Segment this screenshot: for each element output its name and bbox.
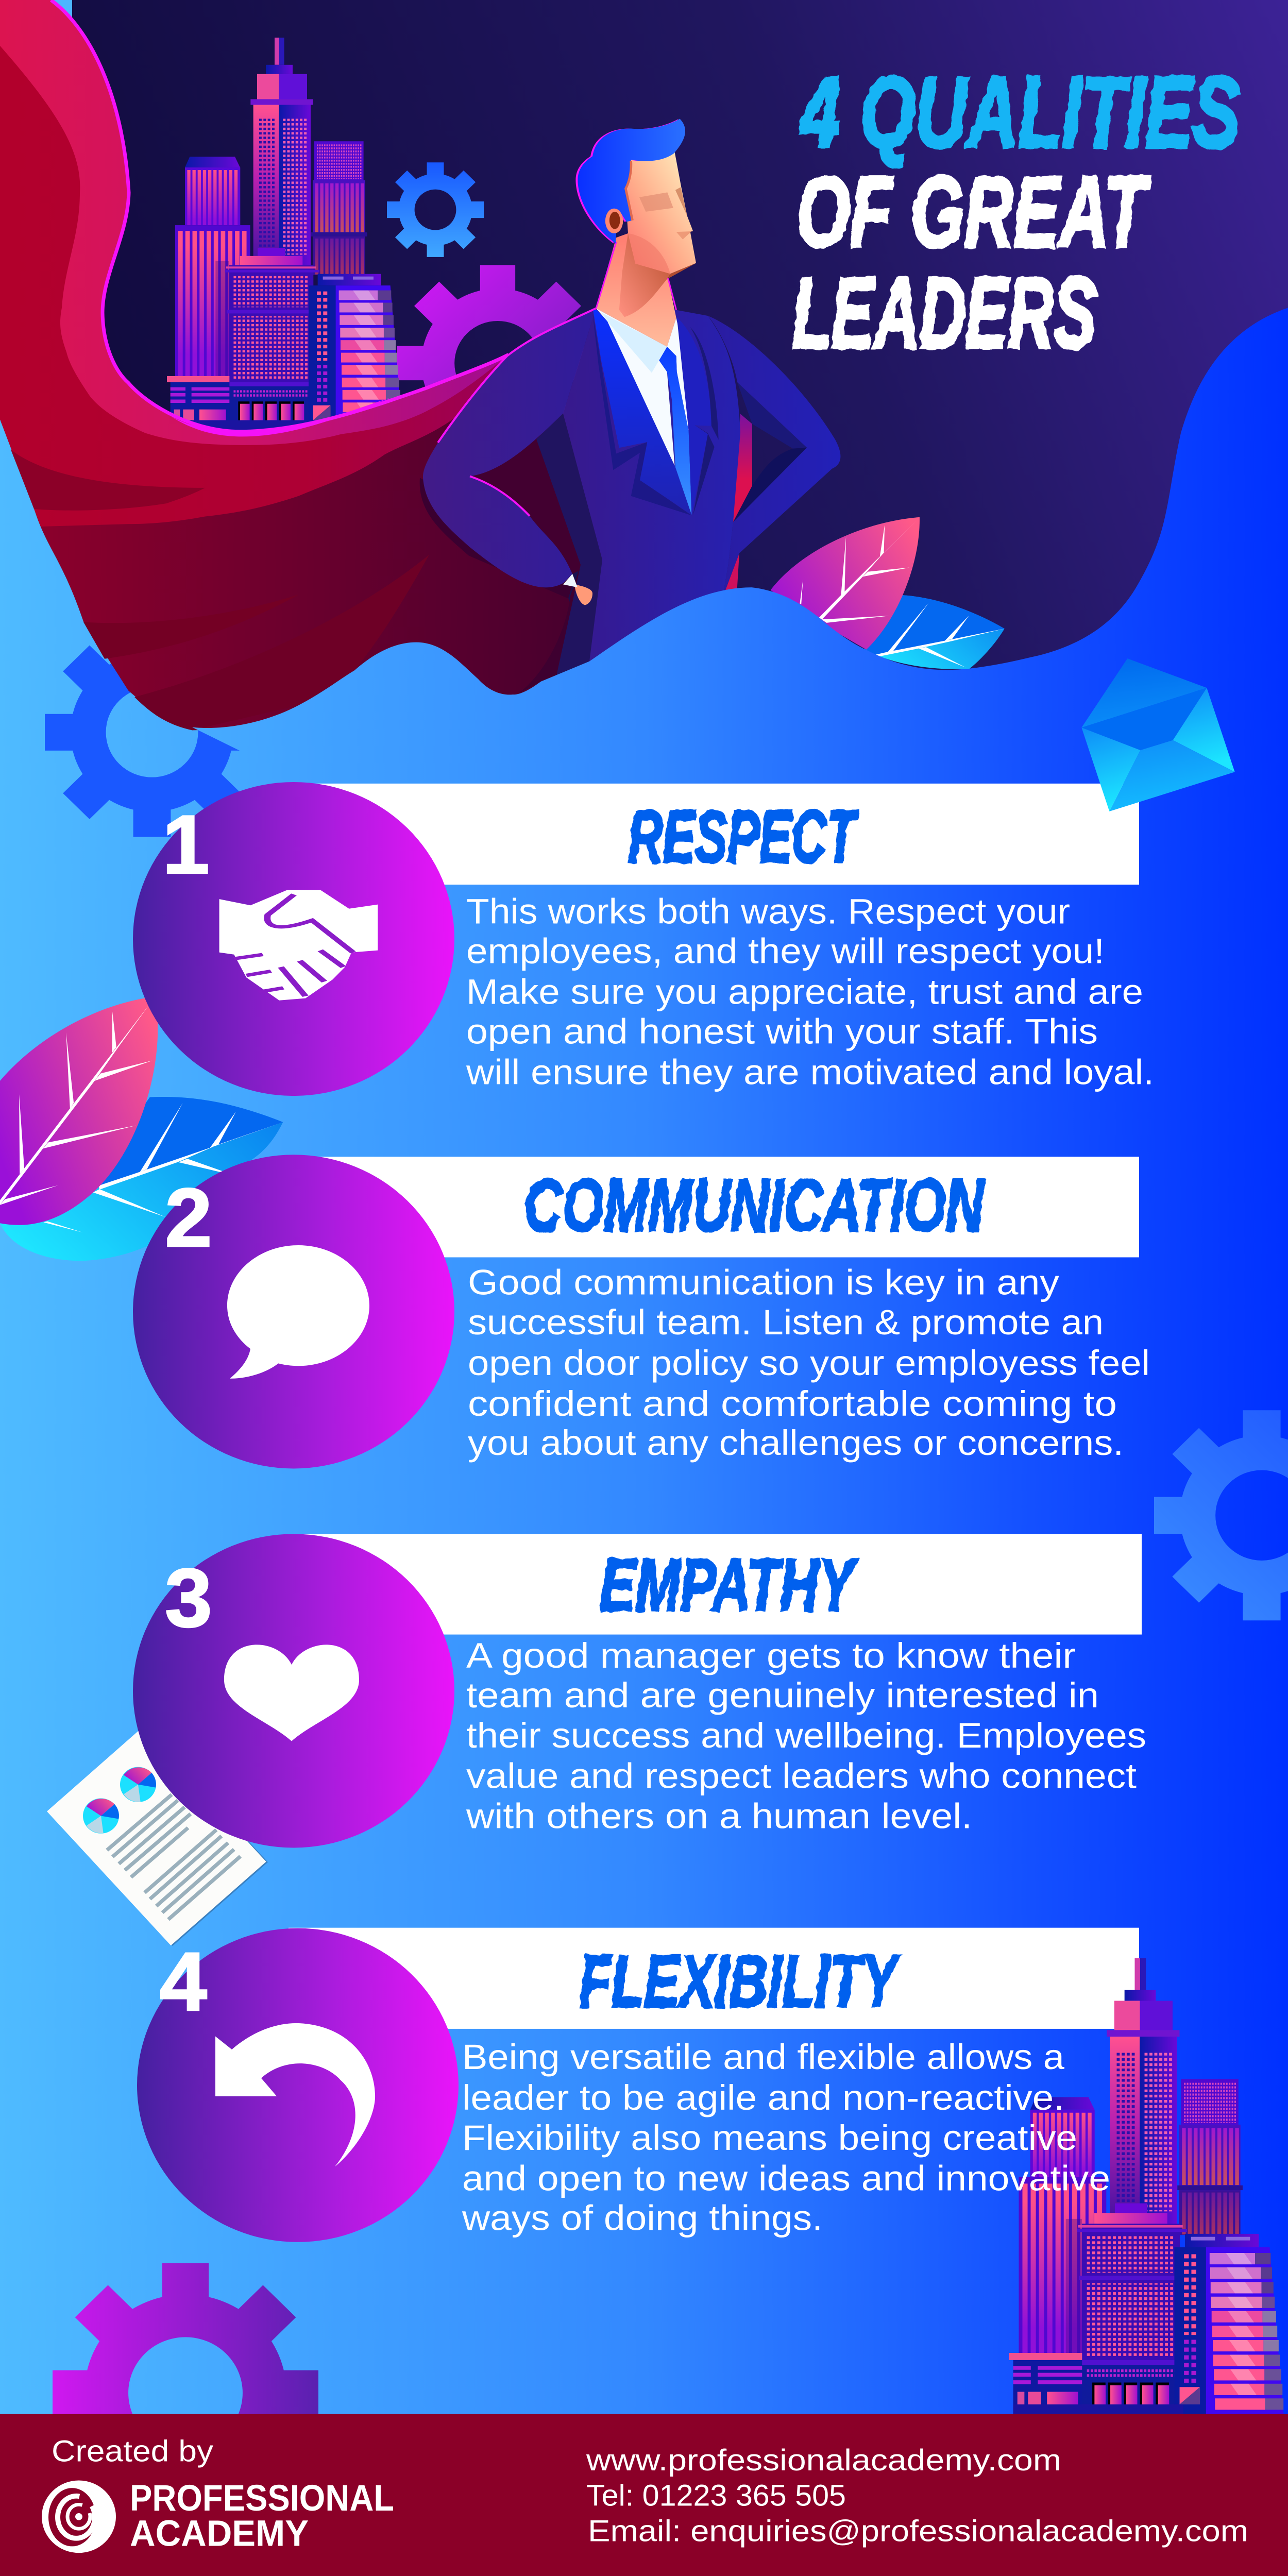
heading: RESPECT (628, 795, 859, 878)
number circle (137, 1928, 459, 2242)
icon: left blue leaf (0, 1097, 283, 1261)
body text (466, 891, 1154, 1092)
left arm (423, 308, 596, 587)
icon: bottom left purple gear (53, 2263, 318, 2523)
shirt (596, 309, 675, 467)
icon: envelope gem (1081, 658, 1235, 811)
number 4: 4 (160, 1935, 207, 2028)
contact details: Email: enquiries@professionalacademy.com (588, 2514, 1248, 2548)
torso shadow band (536, 413, 602, 681)
number circle (133, 1534, 454, 1848)
panel: footer (0, 2414, 1288, 2576)
body text: open door policy so your employess feel (468, 1343, 1150, 1383)
body text: Make sure you appreciate, trust and are (466, 972, 1143, 1011)
neck (596, 233, 676, 347)
body text: their success and wellbeing. Employees (466, 1716, 1146, 1755)
body text: employees, and they will respect you! (466, 931, 1105, 971)
body text: Being versatile and flexible allows a (462, 2037, 1065, 2077)
icon: heart (224, 1645, 359, 1741)
panel: communication (133, 1155, 1150, 1468)
body text: with others on a human level. (466, 1796, 972, 1836)
number 3: 3 (165, 1551, 212, 1645)
body text (466, 1636, 1146, 1836)
body text: value and respect leaders who connect (466, 1756, 1137, 1795)
brand name (130, 2478, 394, 2554)
icon: purple gear (397, 265, 598, 461)
cape strip behind right arm (733, 414, 752, 522)
heading: EMPATHY (600, 1544, 858, 1626)
body text: A good manager gets to know their (466, 1636, 1076, 1675)
heading: FLEXIBILITY (579, 1940, 901, 2023)
brand name: PROFESSIONAL (130, 2478, 394, 2519)
necktie (659, 347, 691, 515)
lapel shadow (592, 313, 691, 515)
icon: large right gear (1154, 1410, 1288, 1620)
pie chart two (83, 1798, 119, 1834)
torso (563, 308, 740, 662)
hand and cuff (574, 584, 592, 605)
panel: hero illustration (0, 0, 1288, 855)
icon: large pale blue gear (45, 628, 259, 837)
inner sleeve (737, 382, 807, 449)
number 2: 2 (165, 1171, 212, 1264)
body text: leader to be agile and non-reactive. (462, 2078, 1064, 2117)
contact details: www.professionalacademy.com (586, 2443, 1061, 2477)
body text: Good communication is key in any (468, 1262, 1059, 1302)
body text: This works both ways. Respect your (466, 891, 1070, 931)
title (792, 56, 1240, 369)
body text: ways of doing things. (462, 2198, 823, 2238)
number circle (133, 782, 454, 1096)
title line 3: LEADERS (792, 257, 1096, 369)
created by label: Created by (52, 2434, 213, 2468)
body text: confident and comfortable coming to (468, 1384, 1117, 1423)
panel: respect (133, 782, 1154, 1096)
blue wave overlay (192, 587, 1082, 855)
section 1 bar (289, 784, 1139, 885)
pie chart one (120, 1767, 156, 1802)
right arm (708, 316, 840, 597)
contact details (586, 2443, 1248, 2548)
body text: will ensure they are motivated and loyal. (466, 1052, 1154, 1092)
cape glimpse through arm (468, 413, 602, 574)
contact details: Tel: 01223 365 505 (586, 2478, 846, 2512)
body text: team and are genuinely interested in (466, 1675, 1099, 1715)
face (625, 152, 696, 274)
body text (468, 1262, 1150, 1463)
businessman figure (423, 118, 840, 681)
body text: open and honest with your staff. This (466, 1011, 1098, 1051)
document text lines (107, 1794, 241, 1920)
icon: undo arrow (215, 2023, 375, 2166)
icon: small blue gear (387, 162, 484, 257)
icon: left pink leaf (0, 998, 158, 1225)
left lapel (593, 310, 691, 515)
heading: COMMUNICATION (524, 1164, 985, 1246)
body text (462, 2037, 1110, 2238)
ear (605, 209, 623, 233)
section 3 bar (289, 1534, 1142, 1635)
icon: handshake (219, 890, 378, 1001)
number circle (133, 1155, 454, 1468)
icon: bottom right city skyline (1009, 1958, 1284, 2419)
dark hero backdrop (72, 0, 1288, 704)
hair (575, 120, 683, 244)
panel: flexibility (137, 1928, 1110, 2242)
icon: speech bubble (227, 1245, 369, 1379)
number 1: 1 (162, 798, 210, 891)
panel: empathy (133, 1534, 1146, 1848)
magenta rim light (438, 308, 596, 516)
body text: and open to new ideas and innovative (462, 2158, 1110, 2198)
icon: document with charts (47, 1727, 268, 1946)
cape (0, 0, 589, 730)
body text: you about any challenges or concerns. (468, 1423, 1124, 1463)
head details (575, 118, 719, 515)
icon: hero blue leaf (865, 595, 1005, 669)
body text: Flexibility also means being creative (462, 2118, 1077, 2158)
section 4 bar (289, 1928, 1139, 2029)
icon: hero pink leaf (771, 517, 920, 650)
body text: successful team. Listen & promote an (468, 1302, 1104, 1342)
footer band (0, 2414, 1288, 2576)
icon: academy logo (42, 2481, 116, 2553)
brand name: ACADEMY (130, 2513, 309, 2554)
right lapel (677, 317, 711, 515)
icon: city skyline (167, 38, 403, 433)
section 2 bar (289, 1157, 1139, 1257)
